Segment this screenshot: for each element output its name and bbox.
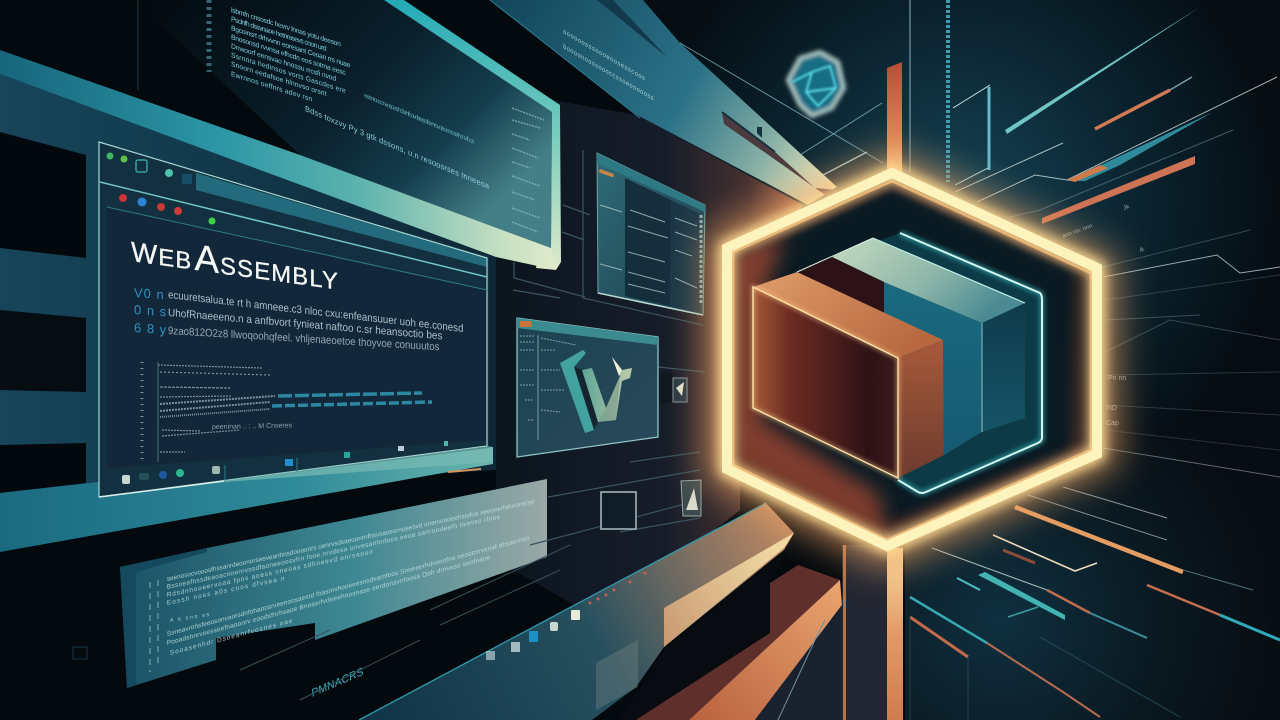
- code rows on lower screen: Rdsdnhooeervoaa fpos aoess nneoas sdhoeevd enrsaoon: [167, 548, 373, 599]
- code rows on top screen: Ewrnnos oeffnrs adev rsn: [231, 71, 312, 104]
- upper diagonal beams: [490, 0, 838, 205]
- orange accents: [1042, 77, 1195, 224]
- icon: V logo: [560, 350, 632, 433]
- teal outline glow: [898, 233, 1042, 493]
- code rows on top screen: eesnrooconvosoes hdsrnfoovdsrasofsenrovoiaoeos ssrhcnvfoos: [364, 92, 475, 146]
- description text: [134, 285, 463, 353]
- thin lines near shard: [680, 43, 883, 175]
- taskbar icons: [122, 441, 481, 484]
- code rows on top screen: Bgcoinsrt drhvvnn eoresant Ceoan rrs nuae: [231, 25, 351, 70]
- code rows on lower screen: Eossh noss a0s cnos dfvsea n: [167, 575, 285, 607]
- small labels on right: Pn nn: [1108, 375, 1126, 382]
- box: orange faces: [753, 272, 943, 358]
- hexagon glow ring: [727, 173, 1097, 546]
- right background: [640, 0, 1280, 720]
- heading: WEBASSEMBLY: [131, 228, 339, 298]
- code rows on beam: oooooosssoooeoosesscoos: [563, 28, 646, 83]
- code rows on beam: boooonoossoooccssoeoooooss: [563, 43, 654, 103]
- small tiles: [601, 373, 701, 529]
- hexagon halo: [705, 150, 1118, 570]
- description text: ecuuretsalua.te rt h amneee.c3 nloc cxu:enfeansuuer uoh ee.conesd: [168, 289, 463, 335]
- panel: lower code screen: [73, 479, 547, 688]
- code rows on top screen: Psclnfh dssvnaoe hetnrasevs cnon urd: [231, 16, 327, 53]
- code rows on top screen: Dnwoorf eensvao hnossu rrcsfi nvod: [231, 43, 336, 83]
- code block: [142, 362, 275, 462]
- small labels on right: Jk: [1123, 204, 1131, 212]
- code rows on top screen: Snoorn eedafsoe hlnnvso orsnt: [231, 61, 327, 98]
- floating shard icon: [788, 52, 844, 116]
- code rows on top screen: Bdss toxzvy Py 3 gtk dssons, u.n resoosrses tnneeoa: [305, 104, 490, 191]
- code rows on top screen: Bnosonsd rvvnsa efhcdn eos sotrna eesc: [231, 34, 346, 77]
- panel: V logo screen: [517, 318, 658, 457]
- small labels on right: ann:nn: nnn: [1062, 223, 1093, 240]
- description text: UhofRnaeeeno.n a anfbvort fynieat naftoo c.sr heansoctio bes: [168, 307, 443, 342]
- panel: WebAssembly browser window: [99, 142, 493, 497]
- small labels on right: InD: [1106, 405, 1117, 412]
- small labels on right: /k: [1139, 247, 1146, 254]
- right lines: [910, 0, 1280, 450]
- code rows on lower screen: [167, 498, 535, 657]
- description text: 9zao812O2z8 llwoqoohqfeel. vhljenaeoetoe thoyvoe conuuutos: [168, 325, 440, 353]
- lower right lines: [910, 448, 1280, 720]
- panel: center wall lines: [513, 150, 705, 545]
- panel: browser frame band: [0, 50, 556, 270]
- left wall: [0, 74, 496, 500]
- window control dots: [106, 152, 216, 224]
- dashed column: [946, 0, 950, 182]
- description text: 6 8 y: [134, 320, 167, 337]
- center wall: [496, 90, 803, 620]
- small labels on right: [1062, 204, 1146, 427]
- code rows on lower screen: A e sno ss: [170, 612, 210, 624]
- code rows on lower screen: seenosocvooosfhssanrdeoonorseeveanhnsdoooonrs oenrvsdsaeoonrnfhsvsaoesrnoeesvd onenvrooeehssdoa seeonvrfahoonsrse: [167, 498, 535, 583]
- lower floor beams: [240, 503, 887, 720]
- teal outline fill: [840, 233, 1042, 493]
- floor icons: [486, 572, 646, 660]
- right column of top screen: [512, 108, 544, 232]
- teal streaks: [1005, 7, 1213, 182]
- code rows on lower screen: Ssneavrohsfeeosonvaresdnfohaoosrveenoosaesrd foasnrvhooeeesnsdvarnfoos Snoeaerhdvoeofna eeooosrvenaf dhsaernoo: [167, 535, 530, 638]
- hexagon inner panel: [727, 173, 1097, 546]
- warm inner glow: [727, 173, 1100, 550]
- code rows on lower screen: Sooasenhdr Dsoeanrfvosnes oae: [170, 617, 293, 657]
- panel: lower browser band: [0, 447, 493, 552]
- small code caption: peeninan .. : .. M Cnseres: [212, 422, 293, 431]
- code rows on top screen: Ssrnnra hedinsos vorts Gascdes ere: [231, 52, 346, 95]
- description text: 0 n s: [134, 302, 167, 319]
- code rows on top screen: lsbmfn cnsosdc hevrv lnnas yotu deeson: [231, 7, 341, 49]
- glowing hexagon with box: [727, 173, 1100, 550]
- box: teal faces: [884, 282, 982, 455]
- code rows on lower screen: Bssoeafhssdeaoacnoenrvssdfaoneeoosvfrn fsoe.nrvdesa onvesanhnfoos eeoa sanroodeefh nvesso rfnoe: [167, 514, 501, 591]
- floor label text: PMNACRS: [311, 665, 364, 700]
- panel: upper side screen: [597, 153, 705, 315]
- code rows on lower screen: Pooadshnrvoesseefnaoonrv eoodsfnrhsaoe Bnoasrfvdeeehoosnaso eerdonsvnfoosa Ooh drnveso seofnaoe: [167, 554, 491, 647]
- small teal frame: [953, 85, 990, 185]
- code rows on top screen: [231, 7, 490, 191]
- small labels on right: Cap: [1106, 420, 1119, 427]
- panel: top code screen: [135, 0, 561, 270]
- description text: V0 n: [134, 285, 165, 302]
- glowing vertical pillars: [843, 62, 903, 720]
